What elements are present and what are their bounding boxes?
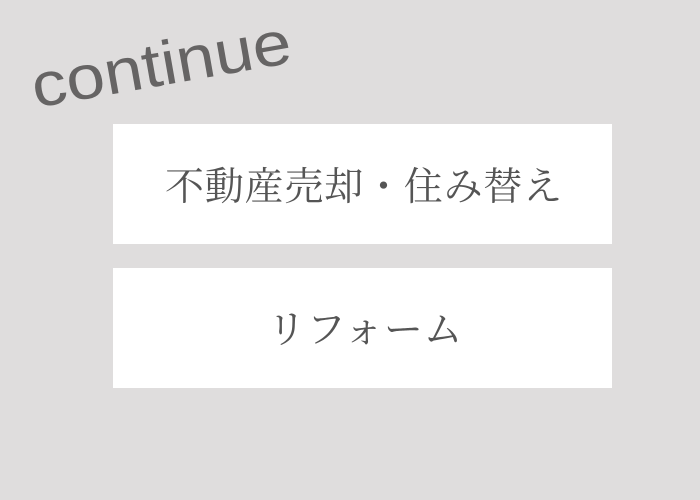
panel: real estate sale and relocation — [113, 124, 612, 244]
label: real estate sale and relocation: 不動産売却・住み替え — [165, 166, 563, 209]
label: renovation: リフォーム — [267, 309, 463, 352]
heading: continue: continue — [26, 8, 296, 121]
panel: renovation — [113, 268, 612, 388]
